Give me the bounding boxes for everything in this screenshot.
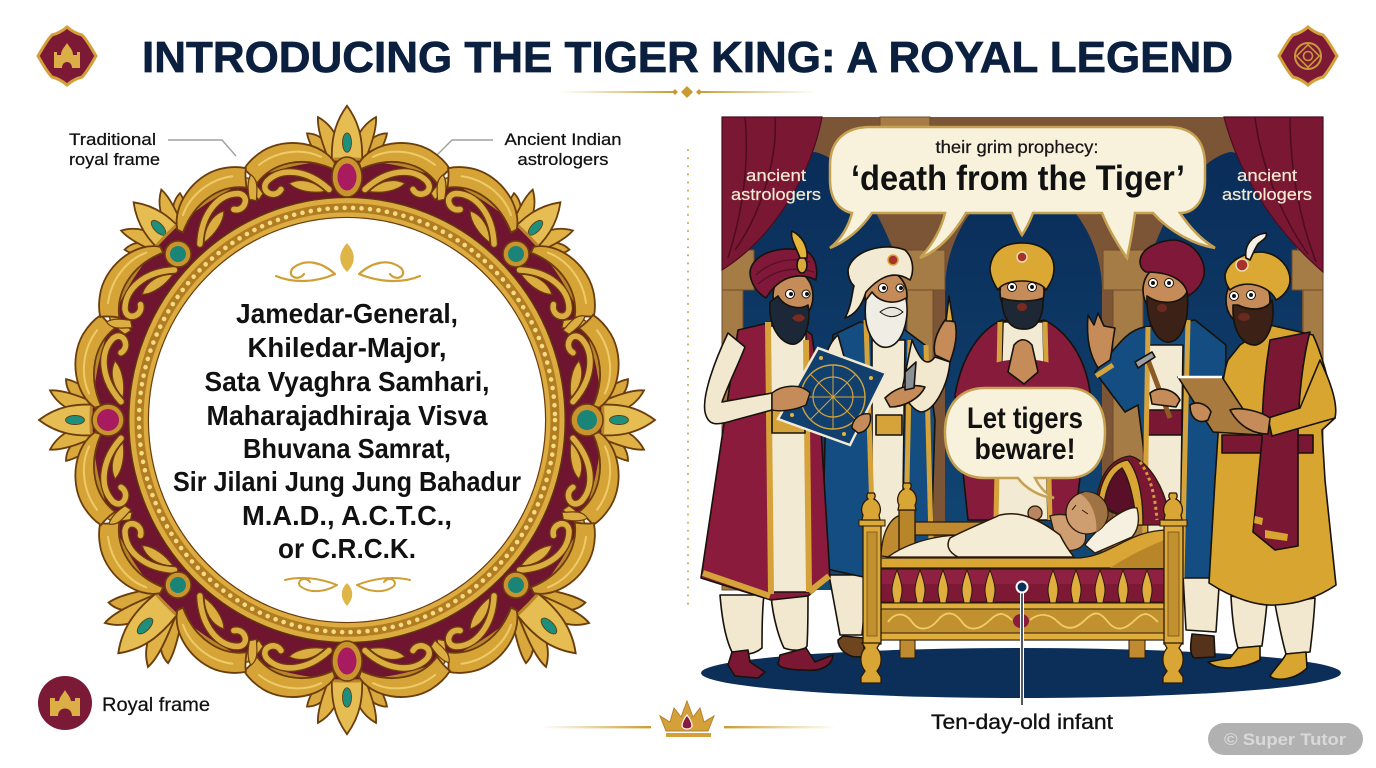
panel: palace scene (701, 117, 1341, 705)
bottom divider with crown (541, 701, 836, 737)
cradle canopy (1096, 456, 1170, 525)
king's titles: Jamedar-General, (236, 298, 458, 329)
label: ancient Indian astrologers: astrologers (518, 150, 608, 169)
label: ancient astrologers right: ancient (1237, 166, 1297, 185)
label: traditional royal frame (69, 130, 236, 169)
label: ancient astrologers left: astrologers (731, 185, 821, 204)
speech bubble: let tigers beware: beware! (974, 433, 1076, 466)
bottom flourish inside frame (285, 578, 410, 606)
bed rail and head curve (880, 530, 1165, 568)
vertical dotted divider (687, 150, 689, 605)
label: ancient astrologers right (1222, 166, 1312, 204)
title: INTRODUCING THE TIGER KING: A ROYAL LEGEND (142, 33, 1233, 82)
king's titles: Sir Jilani Jung Jung Bahadur (173, 466, 521, 497)
label: ancient astrologers left (731, 166, 821, 204)
gems on frame (92, 157, 603, 681)
label: ancient Indian astrologers: Ancient Indian (504, 130, 622, 149)
label: ancient astrologers left: ancient (746, 166, 806, 185)
left post (859, 493, 885, 683)
icon: mandala emblem right (1279, 27, 1337, 85)
prophecy speech bubble (830, 127, 1215, 258)
prophecy speech bubble: their grim prophecy: (936, 137, 1098, 157)
curtains (722, 117, 1323, 272)
king's titles (173, 298, 521, 564)
balusters (892, 570, 1152, 603)
crowns (39, 106, 655, 734)
floor (701, 648, 1341, 698)
inner gold ring (129, 198, 565, 642)
speech bubble: let tigers beware (945, 388, 1105, 498)
watermark (1208, 723, 1363, 755)
ornamented panel (880, 603, 1165, 640)
label: ancient Indian astrologers (437, 130, 622, 169)
king's titles: Sata Vyaghra Samhari, (204, 366, 490, 397)
label: ancient astrologers right: astrologers (1222, 185, 1312, 204)
star chart (778, 348, 886, 445)
title divider (560, 86, 816, 98)
infant (1028, 492, 1108, 550)
king's titles: or C.R.C.K. (278, 533, 416, 564)
gold scrollwork (75, 143, 619, 697)
figure: white-bearded astrologer (822, 247, 956, 657)
legend: royal frame (38, 676, 210, 730)
king's titles: Khiledar-Major, (248, 332, 446, 363)
white centre (149, 218, 545, 622)
icon: crown (660, 701, 714, 737)
legend: royal frame: Royal frame (102, 694, 210, 716)
figure: astrologer with star chart (701, 231, 833, 678)
hands on chart (772, 386, 870, 433)
pillow (1085, 508, 1138, 553)
mattress (888, 535, 1000, 557)
panel: royal frame (39, 106, 655, 734)
right post (1160, 493, 1187, 683)
king's titles: Bhuvana Samrat, (243, 433, 451, 464)
bed maroon panel (880, 569, 1165, 602)
figure: central astrologer in prayer (955, 243, 1090, 520)
inner feet (900, 640, 1145, 658)
king's titles: M.A.D., A.C.T.C., (242, 500, 452, 531)
cradle (859, 456, 1187, 683)
icon: palace emblem left (38, 27, 96, 85)
maroon band (91, 159, 603, 681)
back post and head rest (881, 483, 982, 560)
label: ten-day-old infant: Ten-day-old infant (931, 710, 1113, 734)
figure: astrologer with hammer (1087, 240, 1226, 658)
watermark: © Super Tutor (1224, 730, 1346, 749)
palace backdrop (722, 117, 1323, 590)
king's titles: Maharajadhiraja Visva (206, 400, 488, 431)
speech bubble: let tigers beware: Let tigers (967, 402, 1083, 435)
prophecy speech bubble: ‘death from the Tiger’ (851, 159, 1185, 198)
blanket (948, 514, 1074, 557)
label: traditional royal frame: Traditional (69, 130, 156, 149)
label: traditional royal frame: royal frame (69, 150, 160, 169)
pointer to infant (1016, 582, 1028, 705)
top flourish inside frame (276, 243, 420, 281)
figure: astrologer with book (1178, 233, 1336, 679)
